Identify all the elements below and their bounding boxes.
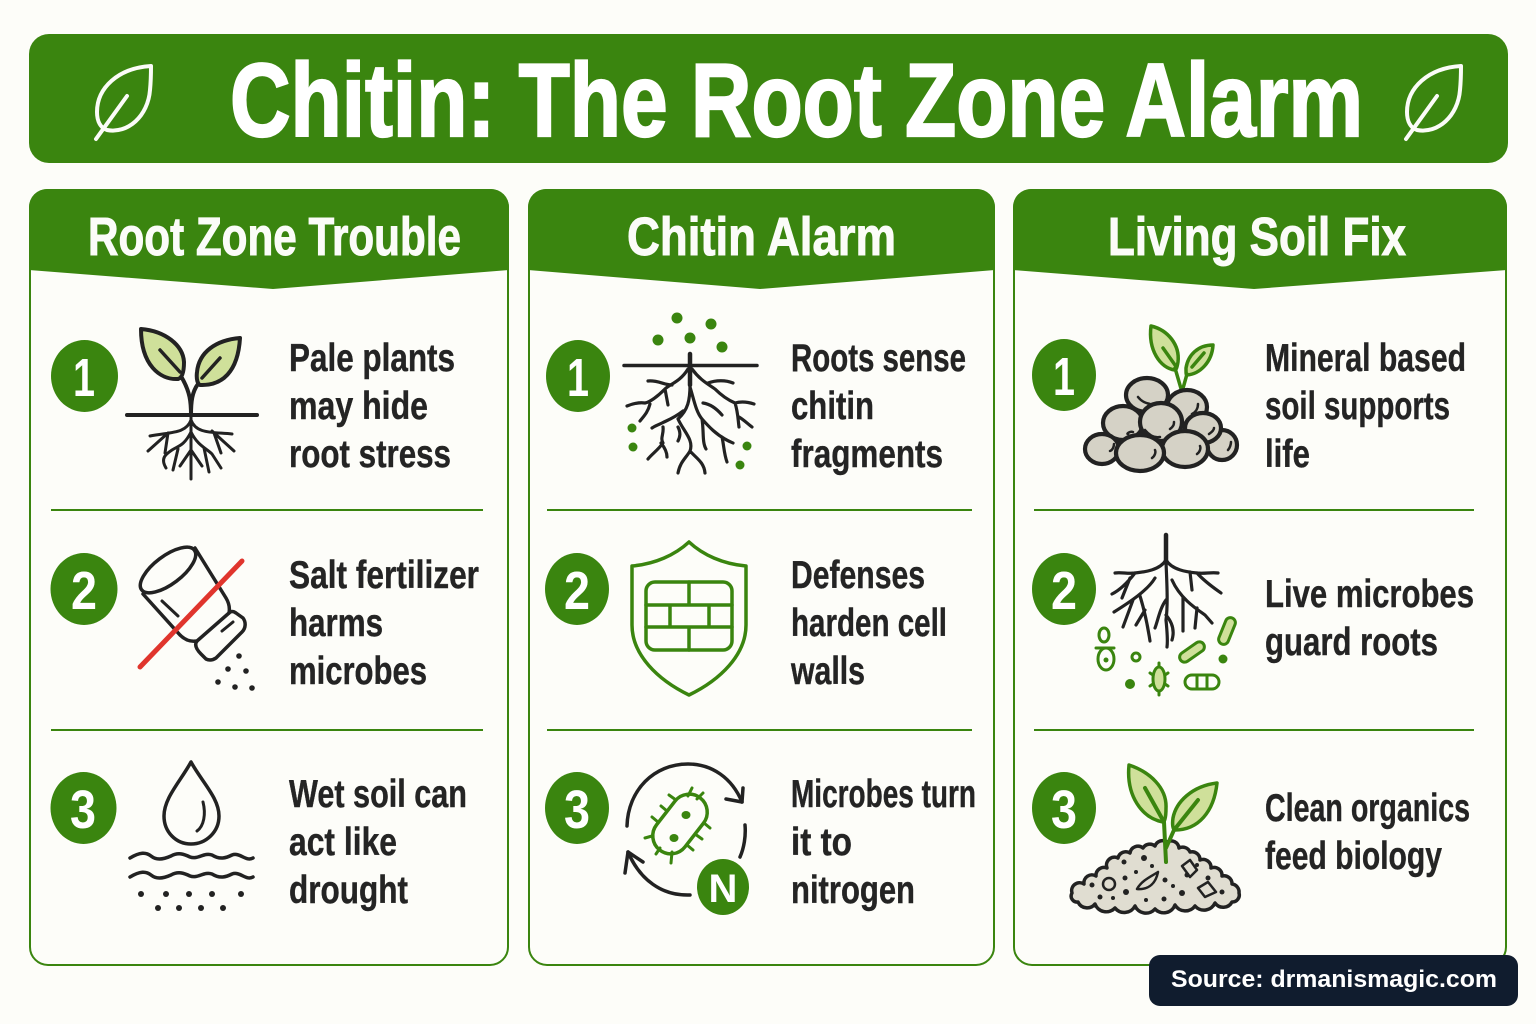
- badge 3: [1032, 772, 1096, 844]
- text 1: life: [1265, 433, 1310, 476]
- text 3: it to: [791, 821, 852, 864]
- badge 1: 1: [1053, 347, 1075, 407]
- icon: roots with microbes: [1096, 535, 1237, 695]
- badge 2: [545, 553, 609, 625]
- text 2: Live microbes: [1265, 573, 1474, 616]
- text 2: harden cell: [791, 602, 947, 645]
- text 1: [1265, 337, 1466, 476]
- panel: Living Soil Fix: [1013, 189, 1507, 965]
- icon: shield with brick wall: [632, 542, 746, 695]
- text 2: walls: [790, 650, 865, 693]
- text 1: soil supports: [1265, 385, 1450, 428]
- icon: sprout on organic soil: [1071, 765, 1239, 913]
- panel header: [29, 189, 509, 289]
- title banner: [29, 34, 1508, 163]
- badge 2: [1032, 553, 1096, 625]
- icon: microbe nitrogen cycle: [625, 764, 749, 915]
- text 3: feed biology: [1265, 835, 1442, 878]
- text 2: Defenses: [791, 554, 925, 597]
- icon: microbe nitrogen cycle: N: [709, 867, 737, 911]
- badge 1: 1: [567, 348, 589, 408]
- badge 3: [545, 772, 609, 844]
- text 2: microbes: [289, 650, 427, 693]
- text 3: nitrogen: [791, 869, 915, 912]
- text 1: may hide: [289, 385, 428, 428]
- text 2: [790, 554, 947, 693]
- text 2: [1265, 573, 1474, 664]
- text 3: [289, 773, 467, 912]
- panel: Root Zone Trouble: [29, 189, 509, 965]
- text 1: chitin: [791, 385, 874, 428]
- text 2: harms: [289, 602, 383, 645]
- text 1: Roots sense: [791, 337, 966, 380]
- icon: left leaf: [96, 66, 151, 139]
- text 1: [791, 337, 966, 476]
- badge 1: [546, 340, 610, 412]
- text 3: Microbes turn: [791, 773, 976, 816]
- source badge: Source: drmanismagic.com: [1171, 966, 1497, 993]
- badge 3: 3: [1051, 780, 1077, 840]
- icon: crossed-out salt shaker: [133, 539, 255, 691]
- badge 2: 2: [564, 561, 590, 621]
- badge 2: 2: [71, 561, 97, 621]
- icon: sprout on mineral rocks: [1085, 326, 1237, 471]
- badge 1: 1: [73, 348, 95, 408]
- text 2: guard roots: [1265, 621, 1438, 664]
- text 2: [289, 554, 479, 693]
- text 1: Pale plants: [289, 337, 455, 380]
- heading: Chitin Alarm: [627, 207, 896, 267]
- panel: Chitin Alarm: [528, 189, 995, 965]
- source badge: [1149, 955, 1518, 1006]
- text 2: Salt fertilizer: [289, 554, 479, 597]
- text 1: [289, 337, 455, 476]
- icon: right leaf: [1406, 66, 1461, 139]
- text 1: Mineral based: [1265, 337, 1466, 380]
- panel header: [1013, 189, 1507, 289]
- badge 1: [51, 340, 118, 412]
- text 3: [791, 773, 976, 912]
- text 3: act like: [289, 821, 397, 864]
- badge 3: [50, 772, 116, 844]
- icon: water drop over wet soil: [130, 762, 253, 911]
- icon: roots sensing chitin fragments: [624, 312, 757, 473]
- text 1: fragments: [791, 433, 943, 476]
- badge 2: [50, 553, 118, 625]
- heading: Living Soil Fix: [1108, 207, 1406, 267]
- badge 2: 2: [1051, 561, 1077, 621]
- panel header: [528, 189, 995, 289]
- text 3: Wet soil can: [289, 773, 467, 816]
- icon: sprout with roots: [127, 329, 257, 479]
- text 3: drought: [289, 869, 408, 912]
- heading: Root Zone Trouble: [88, 207, 461, 267]
- badge 1: [1032, 339, 1096, 411]
- badge 3: 3: [564, 780, 590, 840]
- badge 3: 3: [70, 780, 96, 840]
- text 3: [1265, 787, 1470, 878]
- text 1: root stress: [289, 433, 451, 476]
